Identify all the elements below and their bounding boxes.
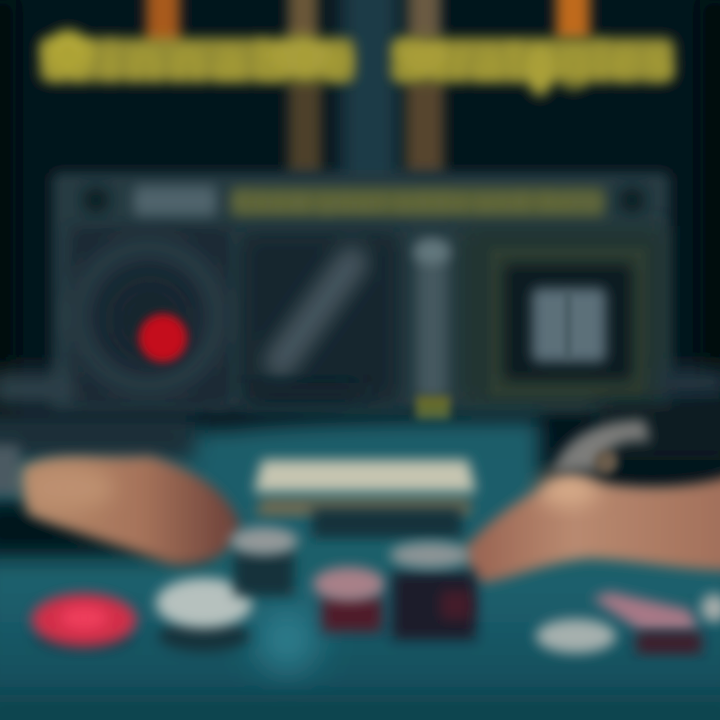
icon: diagonal bar	[250, 262, 360, 400]
chip stack: centre-left	[230, 527, 298, 596]
poker chips	[32, 527, 720, 654]
chip stack: dark	[390, 542, 476, 640]
title: Winnable	[43, 32, 353, 90]
vertical beams behind the title	[146, 0, 590, 175]
panel: strategy board	[52, 172, 670, 420]
hand: left	[22, 456, 240, 565]
hand: right	[462, 420, 720, 582]
icon: vertical column	[414, 240, 450, 420]
title	[40, 30, 674, 96]
chip: red	[32, 594, 136, 652]
table surface	[0, 405, 720, 720]
centre stack of cards	[254, 460, 476, 538]
panel: square frame	[490, 248, 646, 396]
chips: right group	[536, 592, 720, 654]
side rails	[0, 368, 720, 406]
chip: white	[156, 578, 252, 652]
panel header	[82, 186, 646, 216]
icon: roulette wheel with red dot	[78, 246, 218, 386]
panel header: Know your odds and bets	[234, 189, 600, 214]
title: Strategies	[392, 32, 672, 90]
chip stack: pink	[313, 567, 385, 632]
